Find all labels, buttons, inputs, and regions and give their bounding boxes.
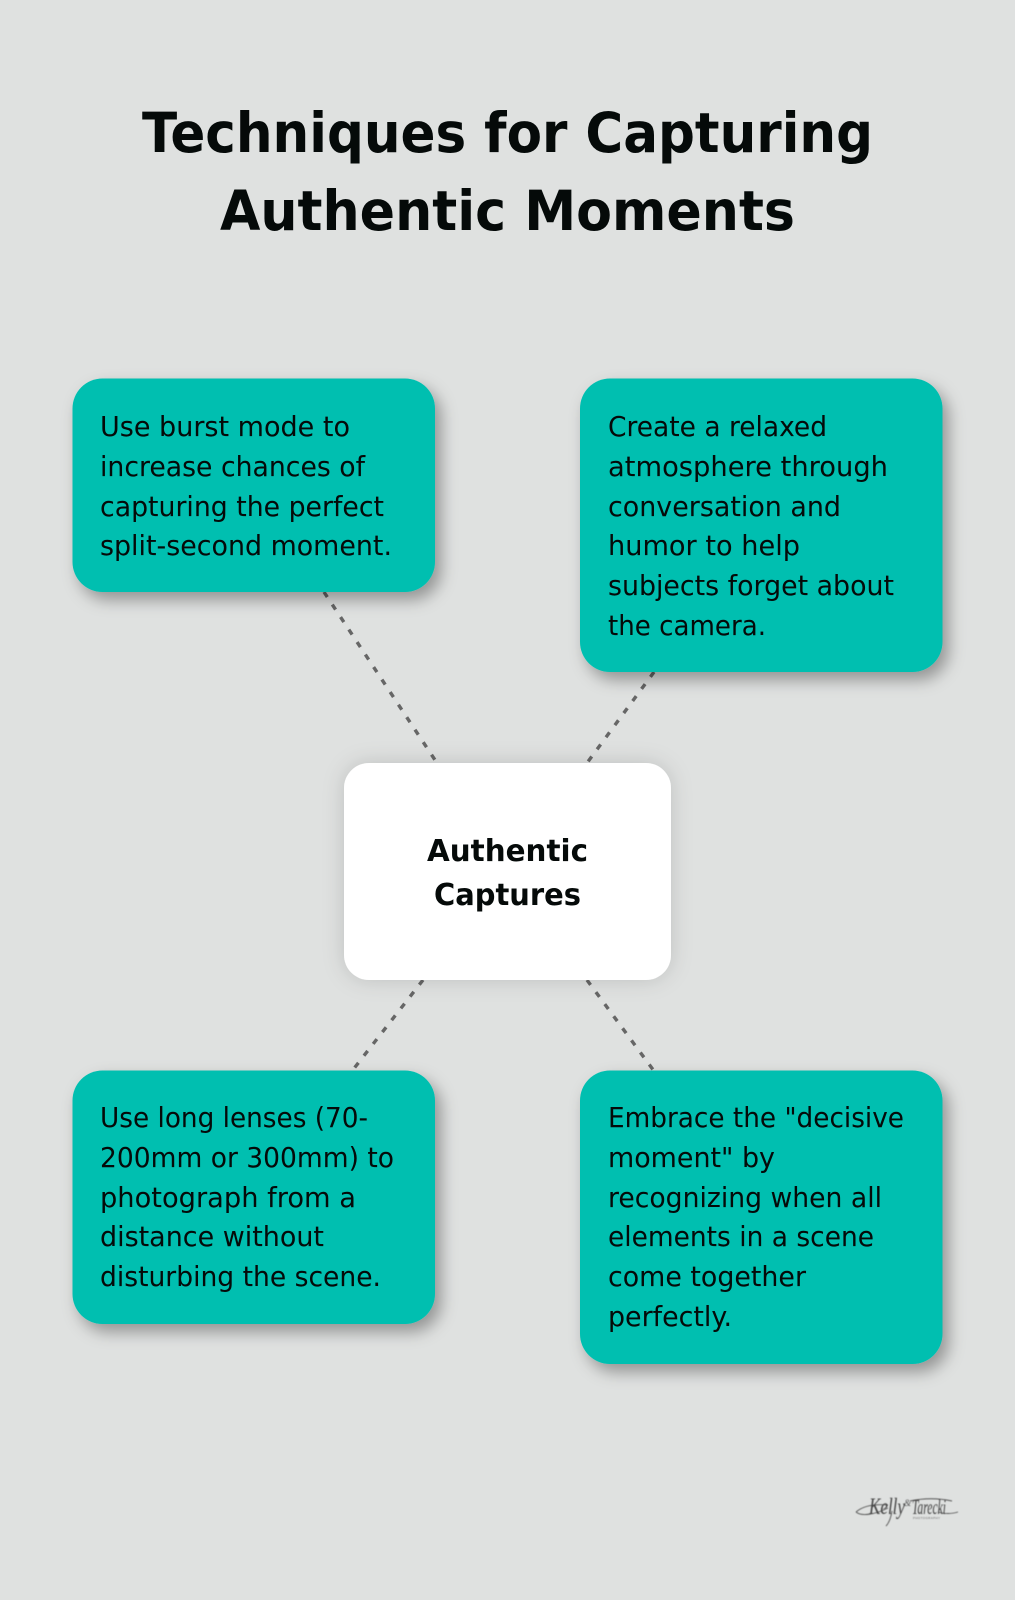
- text: relaxed atmosphere tip: atmosphere through: [608, 450, 888, 483]
- logo: signature: &: [904, 1498, 911, 1508]
- logo: signature: Tarecki: [912, 1495, 946, 1519]
- connector: bottom left card to centre: [352, 980, 423, 1071]
- text: relaxed atmosphere tip: Create a relaxed: [608, 410, 827, 443]
- text: centre label: Captures: [434, 878, 581, 913]
- text: long lenses tip: photograph from a: [100, 1181, 356, 1214]
- title: Authentic Moments: [220, 179, 795, 243]
- title: Techniques for Capturing: [142, 101, 873, 165]
- text: decisive moment tip: come together: [608, 1260, 807, 1293]
- panel: long lenses: [72, 1070, 435, 1324]
- text: decisive moment tip: recognizing when all: [608, 1181, 882, 1214]
- panel: centre node: [344, 763, 671, 980]
- text: centre label: Authentic: [427, 834, 588, 869]
- text: relaxed atmosphere tip: humor to help: [608, 529, 800, 562]
- text: relaxed atmosphere tip: subjects forget about: [608, 569, 894, 602]
- text: burst mode tip: [100, 410, 392, 562]
- text: decisive moment tip: elements in a scene: [608, 1220, 874, 1253]
- text: decisive moment tip: perfectly.: [608, 1300, 732, 1333]
- logo: signature: Kelly: [868, 1494, 906, 1519]
- text: burst mode tip: increase chances of: [100, 450, 366, 483]
- text: burst mode tip: capturing the perfect: [100, 490, 384, 523]
- logo: signature: PHOTOGRAPHY: [913, 1516, 940, 1520]
- text: relaxed atmosphere tip: conversation and: [608, 490, 841, 523]
- connector: bottom right card to centre: [587, 980, 654, 1071]
- panel: burst mode: [72, 378, 435, 592]
- text: decisive moment tip: Embrace the "decisive: [608, 1101, 904, 1134]
- text: long lenses tip: [100, 1101, 394, 1293]
- text: long lenses tip: Use long lenses (70-: [100, 1101, 368, 1134]
- text: decisive moment tip: moment" by: [608, 1141, 775, 1174]
- text: decisive moment tip: [608, 1101, 904, 1333]
- connector: top right card to centre: [587, 672, 654, 763]
- text: burst mode tip: Use burst mode to: [100, 410, 350, 443]
- text: relaxed atmosphere tip: the camera.: [608, 609, 766, 642]
- text: burst mode tip: split-second moment.: [100, 529, 392, 562]
- connector: top left card to centre: [324, 592, 437, 763]
- text: long lenses tip: 200mm or 300mm) to: [100, 1141, 394, 1174]
- text: long lenses tip: disturbing the scene.: [100, 1260, 381, 1293]
- text: centre label: [427, 834, 588, 913]
- title: [142, 101, 873, 243]
- panel: relaxed atmosphere: [580, 378, 942, 672]
- logo: signature: [856, 1494, 958, 1526]
- text: long lenses tip: distance without: [100, 1220, 324, 1253]
- panel: decisive moment: [580, 1070, 942, 1364]
- text: relaxed atmosphere tip: [608, 410, 894, 642]
